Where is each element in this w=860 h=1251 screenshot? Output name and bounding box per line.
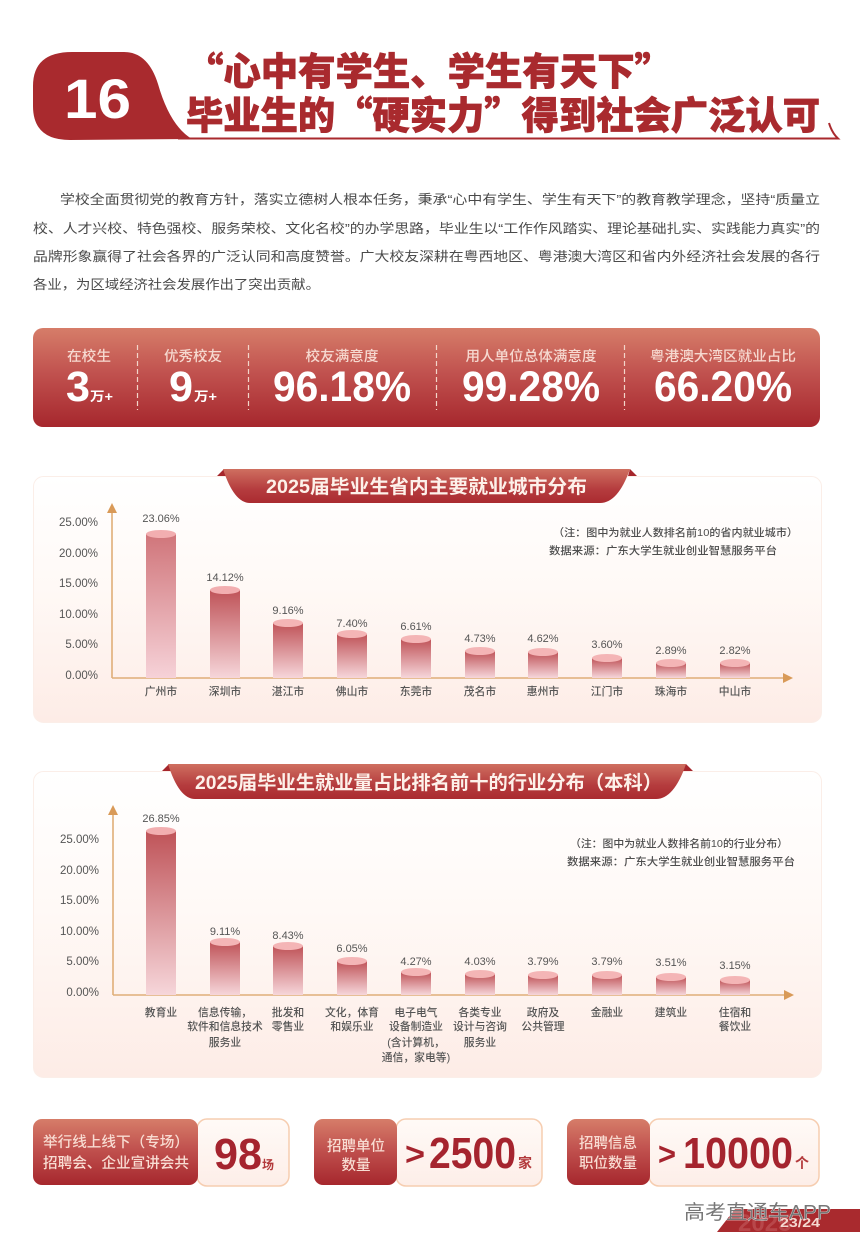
panel: key statistics band: 校友满意度 — [306, 348, 378, 364]
chart title ribbon: industry: 2025届毕业生就业量占比排名前十的行业分布（本科） — [195, 772, 662, 794]
panel: key statistics band: 9 — [169, 363, 193, 411]
bar chart: employment industries: 4.03% — [464, 956, 496, 968]
bar chart: employment industries: 政府及 — [527, 1005, 559, 1019]
bar chart: employment industries: 26.85% — [142, 813, 180, 825]
axes: industry chart: 5.00% — [66, 956, 99, 968]
bar chart: employment industries: 设计与咨询 — [453, 1019, 507, 1033]
axes: city chart: 5.00% — [65, 639, 98, 651]
bar chart: employment industries: 4.27% — [400, 956, 432, 968]
panel: key statistics band: 66.20% — [654, 363, 792, 411]
axes: industry chart: 25.00% — [60, 834, 99, 846]
callout: recruiting employers: > — [405, 1136, 425, 1172]
bar chart: employment industries: 软件和信息技术 — [187, 1019, 263, 1033]
bar chart: employment industries: 批发和 — [272, 1005, 304, 1019]
bar chart: employment cities: 茂名市 — [464, 684, 496, 698]
bar chart: employment cities: 东莞市 — [400, 684, 432, 698]
axes: industry chart: 20.00% — [60, 865, 99, 877]
callout: job postings — [567, 1119, 819, 1186]
callout: job postings: 招聘信息 — [579, 1134, 637, 1152]
footer: page number tag: 23/24 — [780, 1215, 821, 1230]
bar chart: employment industries: (含计算机， — [387, 1035, 445, 1049]
bar chart: employment cities: 3.60% — [591, 639, 623, 651]
bar chart: employment cities: 深圳市 — [209, 684, 241, 698]
bar chart: employment cities: 2.82% — [719, 645, 751, 657]
panel: key statistics band: 用人单位总体满意度 — [466, 348, 596, 364]
axes: city chart: 25.00% — [59, 517, 98, 529]
watermark: 高考直通车APP — [684, 1201, 831, 1224]
bar chart: employment cities: 6.61% — [400, 621, 432, 633]
bar chart: employment industries: 电子电气 — [394, 1005, 438, 1019]
bar chart: employment cities: 佛山市 — [336, 684, 368, 698]
bar chart: employment cities: 14.12% — [206, 572, 244, 584]
bar chart: employment cities: 珠海市 — [655, 684, 687, 698]
bar chart: employment industries: 文化，体育 — [325, 1005, 379, 1019]
callout: job postings: 个 — [795, 1155, 809, 1171]
bar chart: employment industries: 服务业 — [209, 1035, 241, 1049]
bar chart: employment cities — [142, 513, 751, 698]
callout: job postings: > — [658, 1136, 676, 1172]
axes: city chart: 10.00% — [59, 609, 98, 621]
callout: recruiting employers: 招聘单位 — [327, 1137, 385, 1155]
chart note: city: （注：图中为就业人数排名前10的省内就业城市） — [553, 526, 798, 539]
bar chart: employment cities: 23.06% — [142, 513, 180, 525]
header: title — [178, 41, 838, 140]
panel: key statistics band — [33, 328, 820, 427]
callout: recruiting employers — [314, 1119, 542, 1186]
panel: key statistics band: 粤港澳大湾区就业占比 — [650, 348, 796, 364]
panel: key statistics band: 在校生 — [67, 348, 111, 364]
chart title ribbon: industry — [162, 764, 693, 799]
axes: city chart — [59, 503, 793, 683]
intro paragraph: 学校全面贯彻党的教育方针，落实立德树人根本任务，秉承“心中有学生、学生有天下”的教育教学理念，坚持“质量立 — [60, 192, 820, 207]
bar chart: employment industries: 6.05% — [336, 943, 368, 955]
bar chart: employment cities: 4.73% — [464, 633, 496, 645]
axes: industry chart — [60, 805, 794, 1000]
axes: industry chart: 10.00% — [60, 926, 99, 938]
callout: recruitment events — [33, 1119, 289, 1186]
panel: key statistics band: 96.18% — [273, 363, 411, 411]
bar chart: employment industries: 零售业 — [272, 1019, 304, 1033]
bar chart: employment cities: 江门市 — [591, 684, 623, 698]
bar chart: employment cities: 中山市 — [719, 684, 751, 698]
footer: page number tag: 2025 — [738, 1210, 791, 1237]
footer: page number tag — [717, 1209, 860, 1237]
chart title ribbon: city: 2025届毕业生省内主要就业城市分布 — [266, 475, 587, 498]
chart note: industry: 数据来源：广东大学生就业创业智慧服务平台 — [567, 855, 795, 868]
chart note: industry: （注：图中为就业人数排名前10的行业分布） — [570, 837, 788, 850]
panel: key statistics band: 优秀校友 — [164, 348, 222, 364]
intro paragraph: 品牌形象赢得了社会各界的广泛认同和高度赞誉。广大校友深耕在粤西地区、粤港澳大湾区和省内外经济社会发展的各行 — [33, 249, 820, 264]
bar chart: employment industries: 3.15% — [719, 960, 751, 972]
bar chart: employment industries: 3.79% — [591, 956, 623, 968]
intro paragraph: 各业，为区域经济社会发展作出了突出贡献。 — [33, 277, 320, 292]
bar chart: employment cities: 广州市 — [145, 684, 177, 698]
bar chart: employment cities: 4.62% — [527, 633, 559, 645]
bar chart: employment industries: 和娱乐业 — [330, 1019, 374, 1033]
bar chart: employment industries: 8.43% — [272, 930, 304, 942]
bar chart: employment industries: 建筑业 — [655, 1005, 687, 1019]
bar chart: employment industries: 通信，家电等) — [382, 1050, 450, 1064]
callout: recruitment events: 98 — [214, 1130, 262, 1179]
panel: key statistics band: 万+ — [90, 389, 113, 404]
bar chart: employment industries: 3.79% — [527, 956, 559, 968]
chart note: city: 数据来源：广东大学生就业创业智慧服务平台 — [549, 544, 777, 557]
bar chart: employment cities: 湛江市 — [272, 684, 304, 698]
bar chart: employment industries: 各类专业 — [458, 1005, 502, 1019]
chart note: city — [549, 526, 798, 557]
chart note: industry — [567, 837, 795, 868]
chart title ribbon: city — [217, 469, 637, 503]
callout: recruitment events: 招聘会、企业宣讲会共 — [43, 1154, 189, 1172]
bar chart: employment cities: 惠州市 — [527, 684, 559, 698]
panel: key statistics band: 3 — [66, 363, 90, 411]
header: number badge: 16 — [64, 67, 131, 130]
bar chart: employment industries: 餐饮业 — [719, 1019, 751, 1033]
bar chart: employment industries: 住宿和 — [719, 1005, 751, 1019]
bar chart: employment industries: 公共管理 — [521, 1019, 565, 1033]
intro paragraph: 校、人才兴校、特色强校、服务荣校、文化名校”的办学思路，毕业生以“工作作风踏实、理论基础扎实、实践能力真实”的 — [33, 221, 820, 236]
panel: city distribution — [34, 469, 822, 722]
bar chart: employment cities: 7.40% — [336, 618, 368, 630]
intro paragraph — [33, 192, 820, 292]
callout: recruiting employers: 数量 — [342, 1157, 370, 1174]
header: title: 毕业生的“硬实力”得到社会广泛认可 — [186, 85, 820, 140]
bar chart: employment industries: 9.11% — [210, 926, 240, 938]
callout: recruitment events: 举行线上线下（专场） — [43, 1133, 189, 1151]
callout: recruitment events: 场 — [262, 1158, 274, 1172]
panel: industry distribution — [34, 764, 822, 1078]
axes: city chart: 20.00% — [59, 548, 98, 560]
bar chart: employment industries: 教育业 — [145, 1005, 177, 1019]
header: title: “心中有学生、学生有天下” — [186, 41, 672, 96]
callout: job postings: 10000 — [683, 1129, 793, 1178]
axes: industry chart: 0.00% — [66, 987, 99, 999]
bar chart: employment industries: 服务业 — [464, 1035, 496, 1049]
callout: recruiting employers: 家 — [518, 1155, 532, 1171]
bar chart: employment cities: 9.16% — [272, 605, 304, 617]
bar chart: employment cities: 2.89% — [655, 645, 687, 657]
axes: industry chart: 15.00% — [60, 895, 99, 907]
header: number badge — [33, 52, 192, 140]
axes: city chart: 15.00% — [59, 578, 98, 590]
bar chart: employment industries — [142, 813, 751, 1064]
bar chart: employment industries: 设备制造业 — [389, 1019, 443, 1033]
panel: key statistics band: 万+ — [194, 389, 217, 404]
bar chart: employment industries: 3.51% — [655, 957, 687, 969]
panel: key statistics band: 99.28% — [462, 363, 600, 411]
bar chart: employment industries: 信息传输， — [198, 1005, 252, 1019]
bar chart: employment industries: 金融业 — [591, 1005, 623, 1019]
callout: job postings: 职位数量 — [579, 1154, 637, 1172]
callout: recruiting employers: 2500 — [429, 1129, 516, 1178]
axes: city chart: 0.00% — [65, 670, 98, 682]
